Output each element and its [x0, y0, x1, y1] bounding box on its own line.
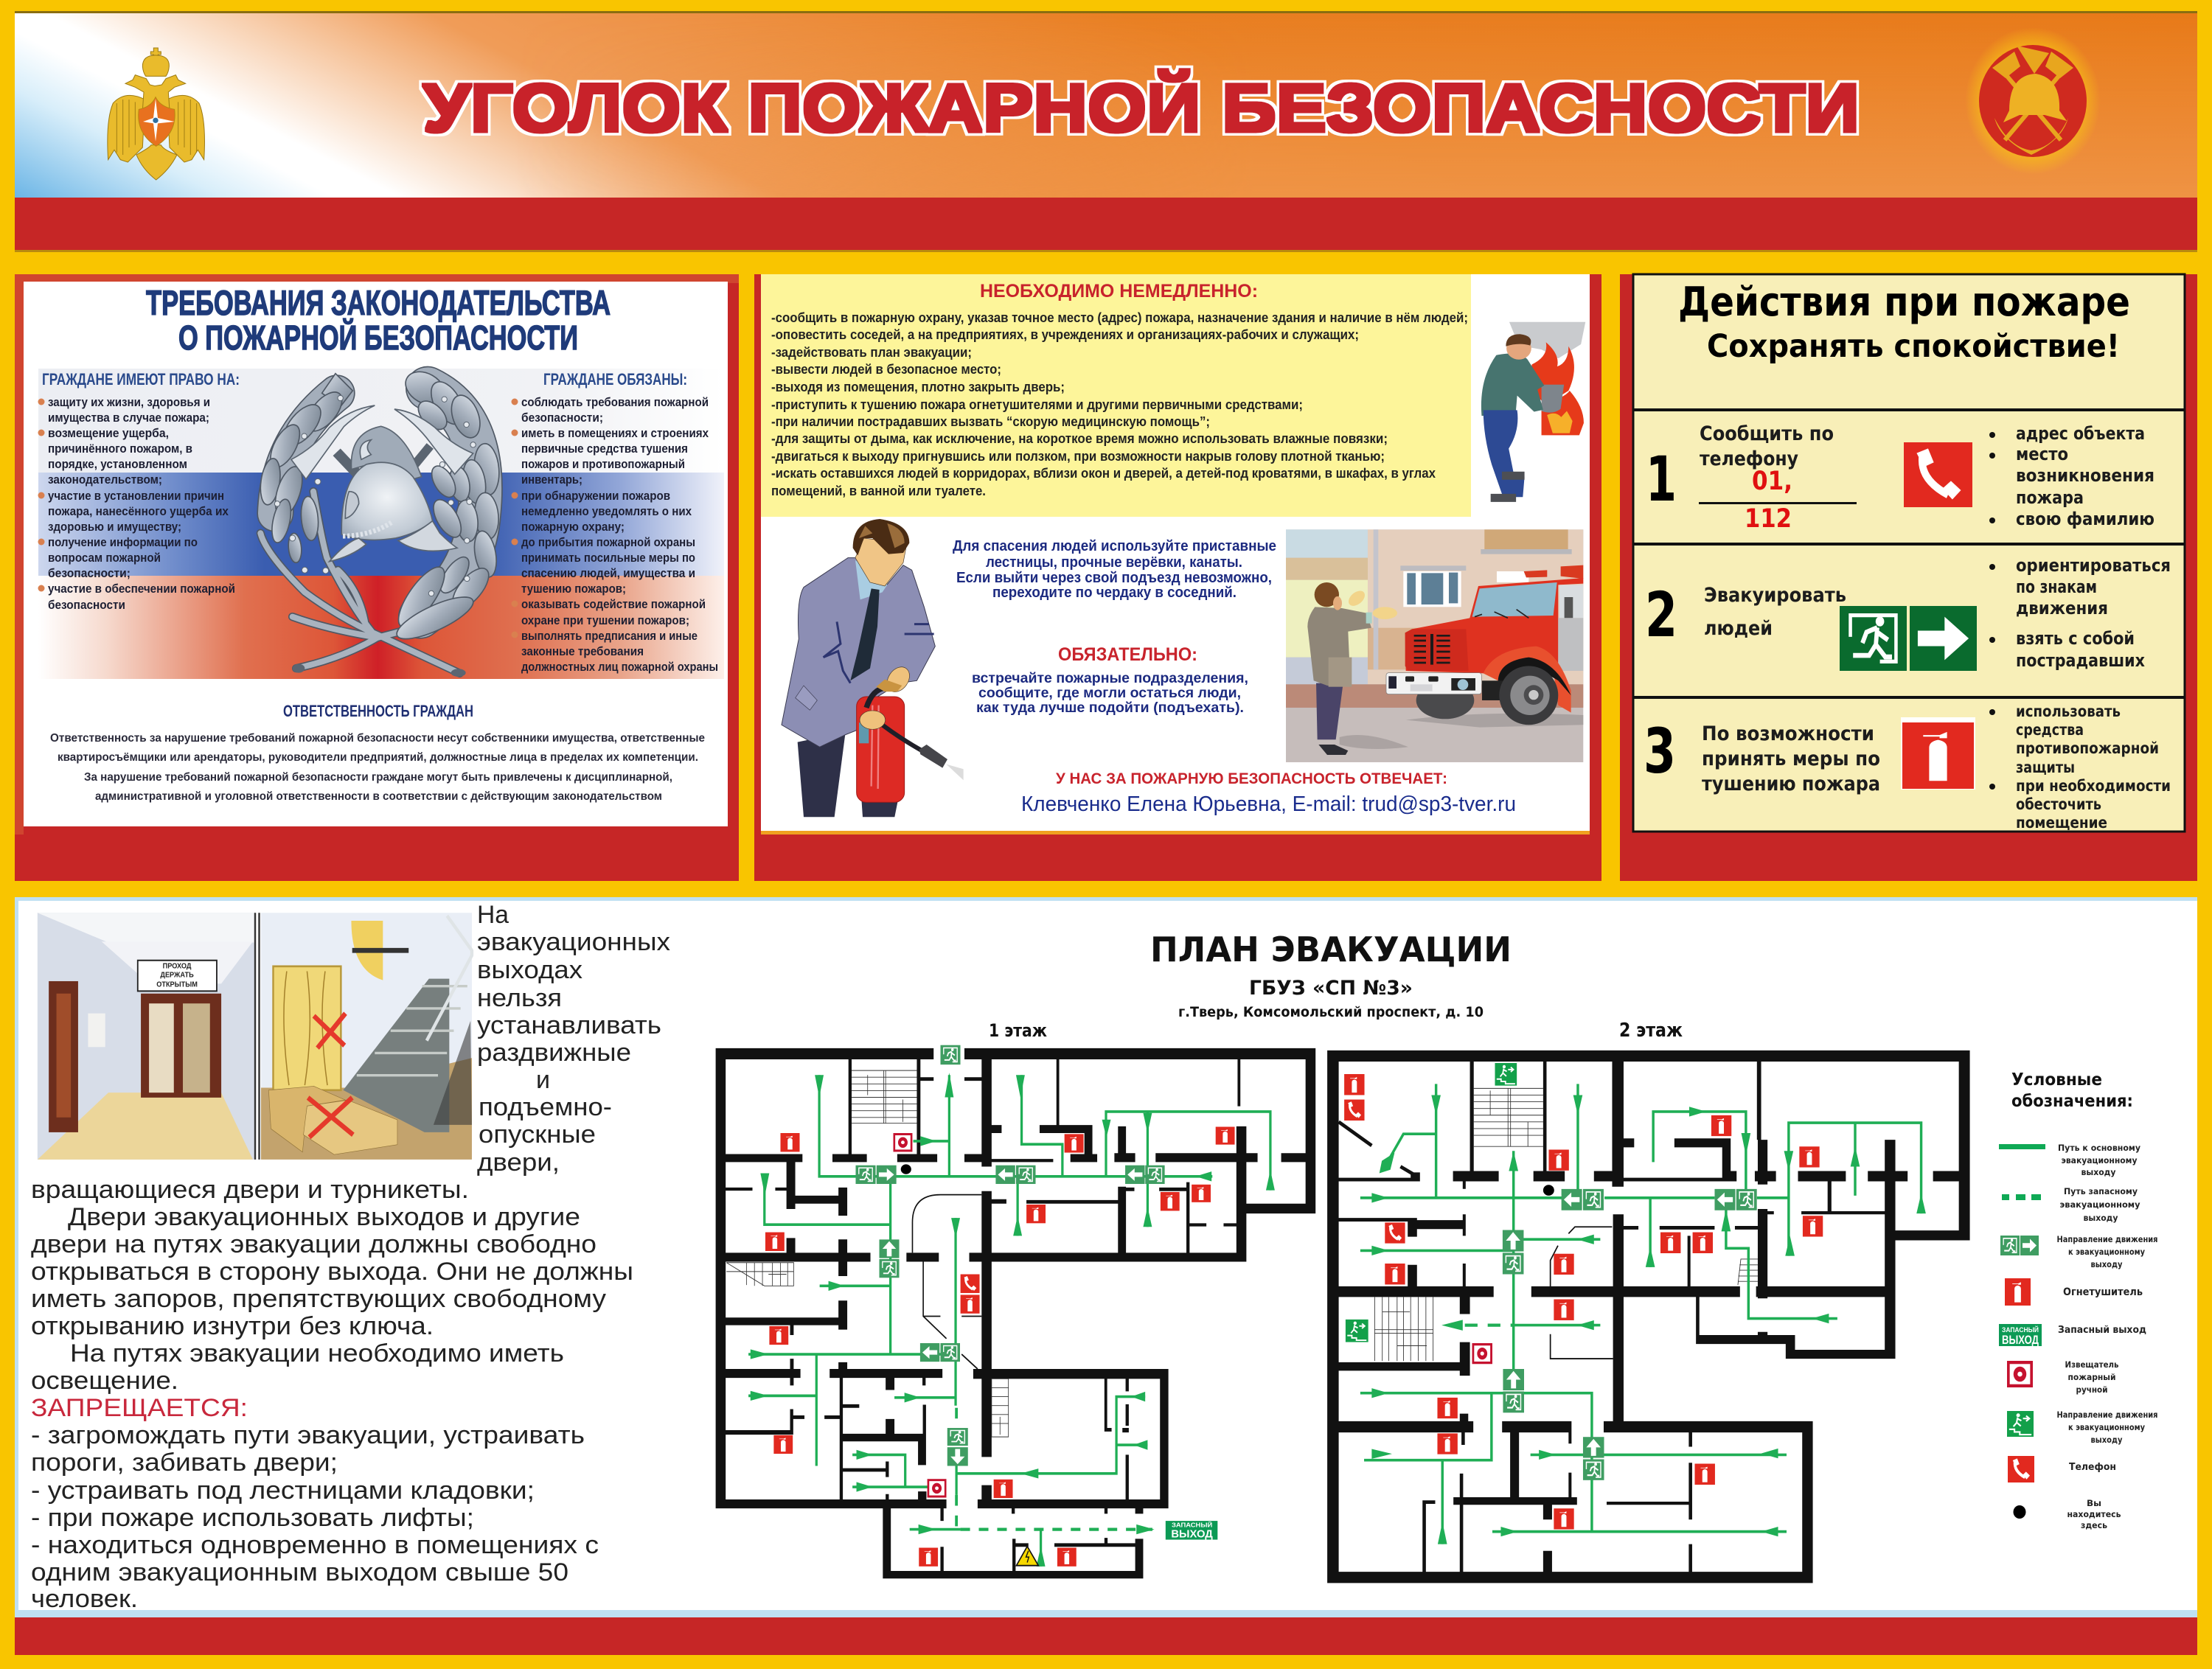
text: citizens have right: участие в установлении причин: [48, 489, 224, 503]
text: citizens have right: пожара, нанесённого ущерба их: [48, 504, 229, 518]
title: УГОЛОК ПОЖАРНОЙ БЕЗОПАСНОСТИ: [423, 69, 1860, 146]
text: exit rules: иметь запоров, препятствующих свободному: [31, 1285, 606, 1313]
yellow notice block: -задействовать план эвакуации;: [771, 345, 972, 360]
legend labels: Телефон: [2069, 1462, 2116, 1473]
text: exit rules: одним эвакуационным выходом свыше 50: [31, 1558, 568, 1586]
step 3: при необходимости: [2016, 777, 2171, 795]
text: citizen responsibility: Ответственность за нарушение требований пожарной безопасности несут собственники имущества, ответственные: [50, 732, 705, 745]
step 3: принять меры по: [1702, 748, 1880, 770]
heading: legislation: ТРЕБОВАНИЯ ЗАКОНОДАТЕЛЬСТВА: [146, 283, 611, 322]
text: citizens must: пожаров и противопожарный: [521, 457, 685, 471]
step 2: [1645, 555, 2171, 671]
legend labels: Запасный выход: [2058, 1325, 2146, 1336]
step 3: противопожарной: [2016, 739, 2159, 757]
text: exit rules: и: [536, 1066, 550, 1094]
text: citizens must: оказывать содействие пожарной: [521, 597, 706, 611]
heading: evacuation plan: г.Тверь, Комсомольский проспект, д. 10: [1178, 1004, 1484, 1020]
flag background: [38, 369, 724, 679]
icon: left emblem eagle: [108, 48, 204, 180]
step 1: адрес объекта: [2016, 423, 2145, 444]
step 2: людей: [1704, 617, 1773, 640]
text: exit rules: - загромождать пути эвакуации, устраивать: [31, 1421, 585, 1449]
illustration: corridor and blocked stairs: [38, 913, 472, 1160]
text: exit rules: пороги, забивать двери;: [31, 1449, 338, 1477]
heading: legislation: [146, 283, 611, 357]
step 1: возникновения: [2016, 465, 2154, 486]
header banner: [15, 11, 2197, 252]
yellow notice block: -для защиты от дыма, как исключение, на короткое время можно использовать влажные повязки;: [771, 431, 1388, 446]
floor plan: second floor: [1327, 1050, 1970, 1583]
man waving: [1307, 582, 1397, 755]
legend labels: выходу: [2081, 1167, 2116, 1177]
legend labels: выходу: [2091, 1435, 2123, 1445]
yellow notice block: -двигаться к выходу пригнувшись или ползком, при возможности накрыв голову плотной тканью;: [771, 449, 1385, 464]
text: rescue advice: Для спасения людей используйте приставные: [953, 538, 1276, 554]
heading: legislation: О ПОЖАРНОЙ БЕЗОПАСНОСТИ: [178, 318, 578, 357]
stairs first floor: [726, 1070, 1009, 1437]
floor plan: first floor: [716, 1045, 1315, 1578]
text: exit rules: подъемно-: [479, 1093, 612, 1121]
yellow notice block: -сообщить в пожарную охрану, указав точное место (адрес) пожара, назначение здания и наличие в нём людей;: [771, 310, 1468, 325]
step 1: пожара: [2016, 487, 2084, 508]
sign: keep passage open: ОТКРЫТЫМ: [156, 980, 198, 989]
text: citizens have right: здоровью и имуществу;: [48, 520, 181, 534]
step 2: Эвакуировать: [1704, 584, 1846, 607]
text: citizens must: принимать посильные меры по: [521, 551, 695, 565]
exit signs first floor: [855, 1045, 1165, 1466]
yellow notice block: -при наличии пострадавших вызвать “скорую медицинскую помощь”;: [771, 414, 1210, 429]
text: exit rules: двери на путях эвакуации должны свободно: [31, 1230, 597, 1258]
step 1: 1: [1646, 443, 1677, 515]
legend labels: эвакуационному: [2062, 1155, 2138, 1165]
legend labels: здесь: [2081, 1520, 2107, 1530]
wreath body: [275, 388, 481, 617]
text: citizens must: [512, 370, 718, 674]
legend labels: к эвакуационному: [2068, 1422, 2145, 1432]
legend symbols: ВЫХОД: [2002, 1333, 2039, 1347]
text: exit rules: человек.: [31, 1585, 138, 1613]
heading: actions: Действия при пожаре: [1678, 279, 2130, 325]
text: exit rules: выходах: [477, 956, 582, 984]
heading: evacuation plan: 1 этаж: [989, 1020, 1047, 1041]
heading: evacuation plan: ПЛАН ЭВАКУАЦИИ: [1150, 930, 1512, 969]
text: citizens must: должностных лиц пожарной охраны: [521, 660, 718, 674]
icon: fire helmet wreath emblem: [258, 365, 501, 677]
text: exit rules: открыванию изнутри без ключа.: [31, 1312, 434, 1340]
pins: [274, 395, 476, 596]
text: exit rules: нельзя: [477, 984, 562, 1012]
legend labels: Направление движения: [2057, 1234, 2157, 1244]
legend labels: выходу: [2084, 1213, 2118, 1223]
yellow notice block: помещений, в ванной или туалете.: [771, 484, 986, 498]
legend heading: [2011, 1070, 2133, 1111]
step 2: пострадавших: [2016, 650, 2145, 671]
illustration: fire truck scene: [1286, 529, 1583, 762]
text: rescue advice: [953, 538, 1276, 601]
legend labels: эвакуационному: [2060, 1199, 2140, 1210]
text: citizens must: охране при тушении пожаров;: [521, 613, 689, 627]
text: citizens must: первичные средства тушения: [521, 442, 688, 456]
step 1: 112: [1745, 504, 1792, 534]
text: responsible person: Клевченко Елена Юрьевна, E-mail: trud@sp3-tver.ru: [1021, 792, 1516, 816]
step 1: Сообщить по: [1700, 422, 1834, 445]
text: citizens have right: безопасности;: [48, 566, 131, 580]
text: mandatory: [972, 644, 1248, 716]
exit signs second floor: [1346, 1063, 1757, 1480]
yellow notice block: -вывести людей в безопасное место;: [771, 362, 1001, 377]
extinguisher and alarm icons first floor: [765, 1127, 1235, 1567]
extinguisher and alarm icons second floor: [1344, 1074, 1823, 1530]
axes: [291, 405, 473, 479]
step 3: тушению пожара: [1702, 773, 1880, 795]
step 1: свою фамилию: [2016, 509, 2154, 529]
step 2: взять с собой: [2016, 628, 2135, 649]
text: mandatory: как туда лучше подойти (подъехать).: [976, 700, 1244, 716]
text: citizens have right: порядке, установленном: [48, 457, 187, 471]
icon: man with extinguisher: [782, 519, 964, 817]
text: citizens must: законные требования: [521, 644, 644, 658]
text: mandatory: ОБЯЗАТЕЛЬНО:: [1058, 644, 1197, 665]
legend labels: Огнетушитель: [2063, 1286, 2143, 1298]
yellow notice block: -искать оставшихся людей в корридорах, вблизи окон и дверей, а детей-под кроватями, в шкафах, в углах: [771, 466, 1436, 481]
text: exit rules: [31, 901, 670, 1613]
legend heading: Условные: [2011, 1070, 2102, 1090]
text: citizens must: выполнять предписания и иные: [521, 629, 698, 643]
text: exit rules: ЗАПРЕЩАЕТСЯ:: [31, 1394, 248, 1422]
text: citizens must: спасению людей, имущества и: [521, 566, 695, 580]
icon: man with bucket at fire: [1481, 322, 1585, 502]
sign: reserve exit: [1166, 1521, 1217, 1540]
text: citizens have right: имущества в случае пожара;: [48, 411, 209, 425]
text: citizen responsibility: ОТВЕТСТВЕННОСТЬ ГРАЖДАН: [283, 702, 473, 720]
text: citizen responsibility: [50, 702, 705, 803]
step 2: ориентироваться: [2016, 555, 2171, 576]
text: citizens have right: защиту их жизни, здоровья и: [48, 395, 210, 409]
sign: reserve exit: ЗАПАСНЫЙ: [1172, 1522, 1213, 1529]
heading: evacuation plan: ГБУЗ «СП №3»: [1249, 977, 1413, 1000]
text: citizens have right: получение информации по: [48, 535, 198, 549]
step 3: помещение: [2016, 814, 2107, 832]
text: citizens have right: вопросам пожарной: [48, 551, 161, 565]
step 2: движения: [2016, 598, 2108, 619]
legend labels: Направление движения: [2057, 1410, 2157, 1420]
text: citizens have right: участие в обеспечении пожарной: [48, 582, 235, 596]
step 1: телефону: [1700, 447, 1798, 470]
heading: actions: Сохранять спокойствие!: [1707, 328, 2120, 365]
step 1: [1646, 422, 2154, 534]
legend heading: обозначения:: [2011, 1092, 2133, 1111]
text: citizens must: инвентарь;: [521, 473, 582, 487]
text: exit rules: - устраивать под лестницами кладовки;: [31, 1477, 535, 1505]
legend labels: Вы: [2087, 1498, 2101, 1508]
panel: legislation requirements: [15, 274, 739, 881]
step 3: использовать: [2016, 703, 2121, 720]
text: citizens must: до прибытия пожарной охраны: [521, 535, 695, 549]
panel: immediate actions: [754, 274, 1601, 881]
yellow notice block: НЕОБХОДИМО НЕМЕДЛЕННО:: [980, 281, 1258, 302]
text: citizen responsibility: административной и уголовной ответственности в соответствии с действующим законодательством: [95, 790, 662, 803]
legend symbols: [1999, 1144, 2045, 1519]
text: exit rules: раздвижные: [477, 1039, 631, 1067]
text: exit rules: освещение.: [31, 1367, 178, 1395]
text: citizens must: соблюдать требования пожарной: [521, 395, 709, 409]
step 3: [1644, 703, 2171, 832]
text: citizens must: тушению пожаров;: [521, 582, 626, 596]
text: exit rules: устанавливать: [477, 1011, 661, 1039]
sign: keep passage open: [138, 961, 217, 991]
text: exit rules: опускные: [479, 1121, 596, 1149]
text: exit rules: вращающиеся двери и турникеты.: [31, 1176, 469, 1204]
step 3: 3: [1644, 715, 1676, 787]
yellow notice block: -выходя из помещения, плотно закрыть дверь;: [771, 380, 1065, 394]
yellow notice block: -оповестить соседей, а на предприятиях, в учреждениях и организациях-рабочих и служащих;: [771, 327, 1359, 342]
step 3: защиты: [2016, 759, 2075, 776]
text: citizens have right: ГРАЖДАНЕ ИМЕЮТ ПРАВО НА:: [42, 370, 240, 388]
step 3: По возможности: [1702, 722, 1874, 745]
text: citizens have right: безопасности: [48, 598, 125, 612]
text: exit rules: эвакуационных: [477, 928, 670, 956]
text: rescue advice: лестницы, прочные верёвки, канаты.: [986, 554, 1242, 571]
text: citizens must: пожарную охрану;: [521, 520, 625, 534]
step 1: место: [2016, 444, 2068, 464]
text: responsible person: [1021, 770, 1516, 816]
stairs second floor: [1374, 1088, 1758, 1361]
text: rescue advice: Если выйти через свой подъезд невозможно,: [956, 570, 1272, 586]
sign: keep passage open: ПРОХОД: [163, 962, 192, 971]
step 2: по знакам: [2016, 576, 2097, 597]
text: citizens must: немедленно уведомлять о них: [521, 504, 692, 518]
step 3: обесточить: [2016, 795, 2101, 813]
legend labels: пожарный: [2067, 1372, 2116, 1382]
legend labels: Путь запасному: [2064, 1186, 2138, 1196]
text: citizen responsibility: квартиросъёмщики или арендаторы, руководители предприятий, должностные лица в пределах их компетенции.: [58, 751, 698, 764]
wreath leaves: [258, 365, 501, 647]
text: rescue advice: переходите по чердаку в соседний.: [992, 585, 1237, 601]
walls first floor: [716, 1048, 1315, 1578]
text: exit rules: - при пожаре использовать лифты;: [31, 1504, 474, 1532]
evacuation routes second floor: [1360, 1084, 1921, 1544]
text: exit rules: Двери эвакуационных выходов и другие: [68, 1203, 580, 1231]
text: citizens must: безопасности;: [521, 411, 603, 425]
text: citizens have right: возмещение ущерба,: [48, 426, 169, 440]
sign: keep passage open: ДЕРЖАТЬ: [160, 971, 194, 980]
legend labels: выходу: [2091, 1259, 2123, 1269]
yellow notice block: [761, 274, 1471, 517]
text: exit rules: - находиться одновременно в помещениях с: [31, 1531, 599, 1559]
text: exit rules: открываться в сторону выхода. Они не должны: [31, 1258, 633, 1286]
text: exit rules: двери,: [477, 1149, 560, 1177]
step 3: средства: [2016, 721, 2084, 739]
step 2: 2: [1645, 579, 1677, 651]
text: citizens have right: [38, 370, 240, 612]
text: exit rules: На: [477, 901, 509, 929]
text: citizens must: иметь в помещениях и строениях: [521, 426, 709, 440]
panel: actions in case of fire: [1620, 274, 2197, 881]
text: citizens have right: законодательством;: [48, 473, 162, 487]
evacuation routes first floor: [748, 1075, 1270, 1567]
text: mandatory: сообщите, где могли остаться люди,: [978, 686, 1241, 701]
text: citizen responsibility: За нарушение требований пожарной безопасности граждане могут быть привлечены к дисциплинарной,: [84, 771, 672, 784]
legend labels: к эвакуационному: [2068, 1247, 2145, 1257]
legend symbols: ЗАПАСНЫЙ: [2002, 1325, 2039, 1334]
text: responsible person: У НАС ЗА ПОЖАРНУЮ БЕЗОПАСНОСТЬ ОТВЕЧАЕТ:: [1056, 770, 1447, 787]
legend labels: Путь к основному: [2058, 1143, 2140, 1153]
panel: evacuation exits and plan: [15, 897, 2197, 1655]
heading: evacuation plan: [989, 930, 1683, 1042]
sign: reserve exit: ВЫХОД: [1171, 1528, 1213, 1540]
text: citizens must: ГРАЖДАНЕ ОБЯЗАНЫ:: [543, 370, 687, 388]
step 1: 01,: [1752, 467, 1792, 496]
legend labels: ручной: [2076, 1384, 2107, 1395]
icon: right fire service emblem: [1965, 27, 2101, 175]
legend labels: Извещатель: [2065, 1359, 2119, 1370]
heading: actions: [1678, 279, 2130, 365]
legend labels: [2057, 1143, 2157, 1530]
walls second floor: [1327, 1050, 1970, 1583]
legend labels: находитесь: [2067, 1509, 2121, 1519]
legend: [1999, 1070, 2157, 1530]
heading: evacuation plan: 2 этаж: [1619, 1020, 1683, 1042]
wreath stems: [260, 492, 459, 673]
helmet: [330, 426, 457, 562]
text: exit rules: На путях эвакуации необходимо иметь: [70, 1339, 564, 1367]
text: citizens must: при обнаружении пожаров: [521, 489, 670, 503]
text: citizens have right: причинённого пожаром, в: [48, 442, 192, 456]
yellow notice block: -приступить к тушению пожара огнетушителями и другими первичными средствами;: [771, 397, 1303, 412]
text: mandatory: встречайте пожарные подразделения,: [972, 671, 1248, 686]
